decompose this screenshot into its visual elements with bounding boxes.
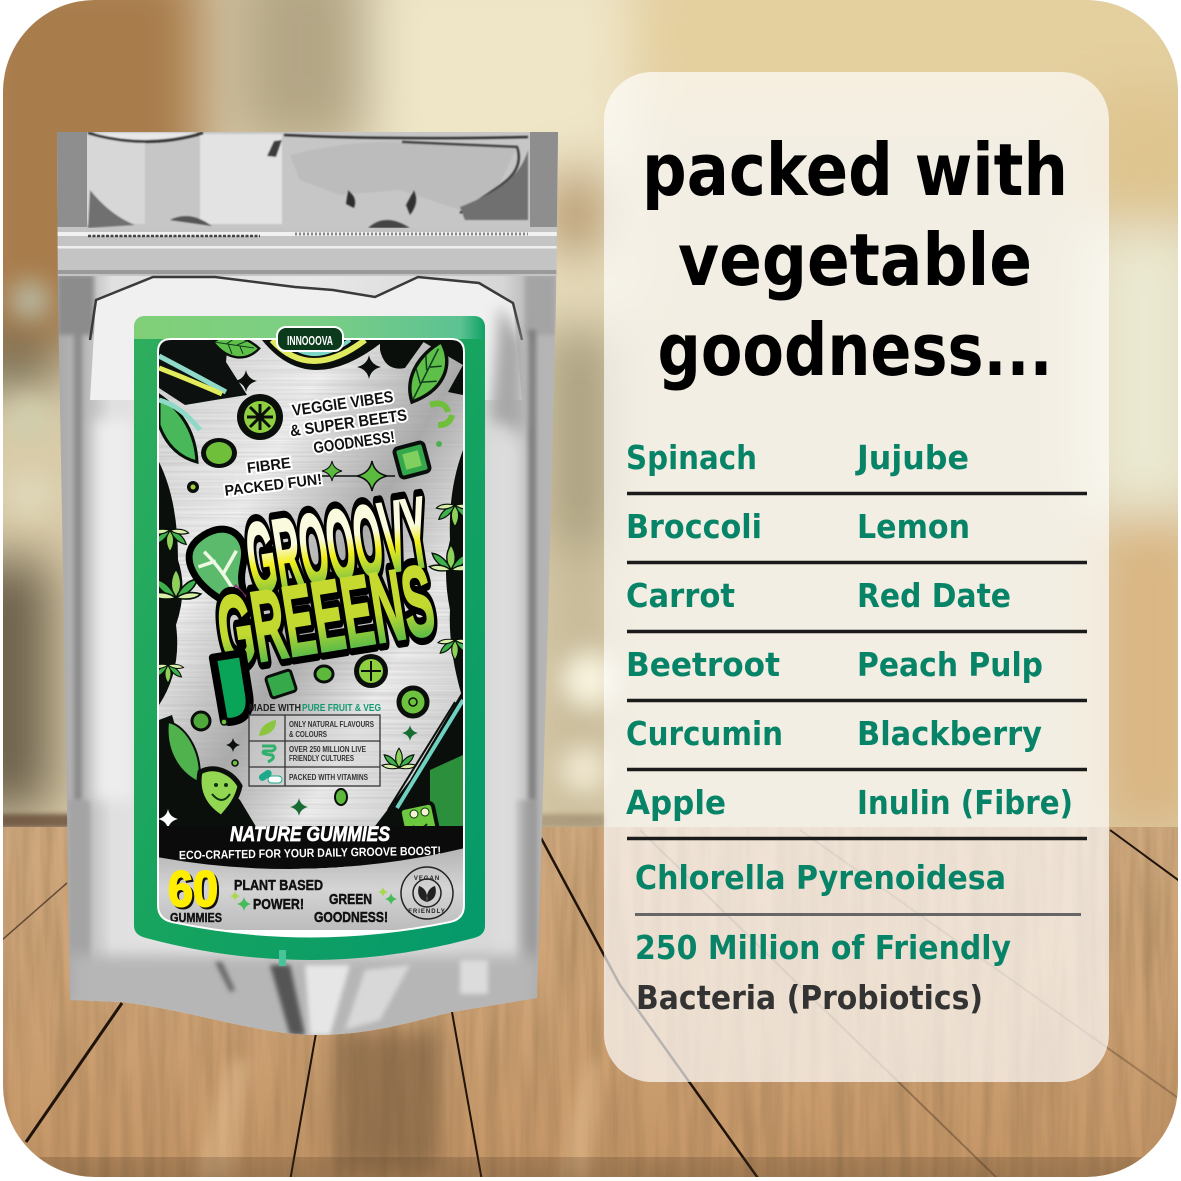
tagline: veggie vibes (288, 389, 408, 455)
green goodness: GREEN (329, 891, 372, 908)
claims table: PACKED WITH VITAMINS (289, 773, 369, 782)
top swirl artwork (159, 326, 463, 462)
tagline: veggie vibes: & SUPER BEETS (289, 407, 408, 440)
green goodness: GOODNESS! (314, 909, 388, 926)
brand badge (277, 327, 343, 351)
spinach leaf (186, 526, 249, 605)
ingredient table: Broccoli (626, 507, 762, 546)
nature gummies banner text (180, 826, 440, 860)
ingredient table: 250 Million of Friendly (635, 928, 1011, 967)
icon: vegan friendly badge: FRIENDLY (408, 909, 446, 915)
ingredient table: Curcumin (626, 714, 783, 753)
heading: vegetable (678, 218, 1032, 302)
product pouch (50, 125, 565, 1045)
side fern decoration (151, 450, 474, 705)
product pouch: GROOOVY (239, 476, 437, 615)
ingredient table: Red Date (857, 576, 1011, 615)
claims table (249, 703, 381, 786)
claims table: & COLOURS (289, 730, 328, 739)
tagline: veggie vibes: VEGGIE VIBES (291, 389, 395, 420)
icon: vegan friendly badge: VEGAN (414, 876, 440, 882)
gummies under title (192, 654, 427, 816)
foil pouch body (50, 125, 565, 1045)
tagline: veggie vibes: GOODNESS! (312, 429, 396, 457)
plant based power: POWER! (253, 896, 304, 913)
side seal strips (57, 132, 560, 1000)
nature gummies banner text: ECO-CRAFTED FOR YOUR DAILY GROOVE BOOST! (179, 844, 441, 862)
product pouch: GROOOVY (239, 476, 437, 615)
claims table: FRIENDLY CULTURES (289, 754, 355, 763)
black letter outline (215, 488, 438, 671)
60 gummies count: 60 (168, 861, 218, 917)
60 gummies count: 60 (170, 863, 220, 919)
heading (642, 128, 1068, 392)
silver label panel (157, 338, 465, 938)
ingredient table: Apple (626, 783, 726, 822)
product pouch: GREEENS (210, 544, 441, 689)
ingredient table: Carrot (626, 576, 735, 615)
ingredient table: Beetroot (626, 645, 780, 684)
ingredient table (626, 438, 1087, 1017)
nature gummies banner text: NATURE GUMMIES (230, 823, 390, 846)
bottom silver strip (157, 848, 465, 930)
ingredient table: Bacteria (Probiotics) (636, 978, 983, 1017)
60 gummies count: GUMMIES (170, 910, 222, 925)
brand badge: INNOOOVA (287, 333, 333, 348)
tagline: fibre packed fun (222, 455, 324, 498)
title: groovy greens (186, 488, 438, 726)
zip track (57, 228, 557, 276)
ingredient table: Peach Pulp (857, 645, 1043, 684)
claims table: MADE WITH (249, 703, 301, 714)
ingredient table: Spinach (626, 438, 757, 477)
claims table: ONLY NATURAL FLAVOURS (289, 720, 375, 729)
lower-corner artwork (158, 690, 463, 870)
lime slices and gummies (187, 394, 452, 493)
product pouch: GREEENS (210, 544, 441, 689)
body reflections (70, 305, 540, 1045)
black banner (157, 826, 465, 869)
tagline: fibre packed fun: PACKED FUN! (224, 471, 323, 500)
claims table: OVER 250 MILLION LIVE (289, 745, 367, 754)
icon: vegan friendly badge (401, 867, 453, 919)
plant based power: PLANT BASED (234, 877, 323, 894)
panel: ingredients (604, 72, 1109, 1082)
heading: goodness... (658, 308, 1052, 392)
foil seal crinkles (85, 133, 528, 228)
tagline: fibre packed fun: FIBRE (246, 455, 292, 477)
ingredient table: Blackberry (857, 714, 1042, 753)
claims table: PURE FRUIT & VEG (302, 703, 381, 714)
green goodness (314, 887, 397, 926)
heading: packed with (642, 128, 1068, 212)
ingredient table: Chlorella Pyrenoidesa (635, 858, 1006, 897)
green label (134, 316, 485, 960)
ingredient table: Inulin (Fibre) (857, 783, 1073, 822)
plant based power (230, 880, 323, 911)
ingredient table: Jujube (855, 438, 969, 477)
ingredient table: Lemon (857, 507, 970, 546)
gusset scallop (90, 277, 522, 400)
wooden table (0, 827, 1181, 1181)
